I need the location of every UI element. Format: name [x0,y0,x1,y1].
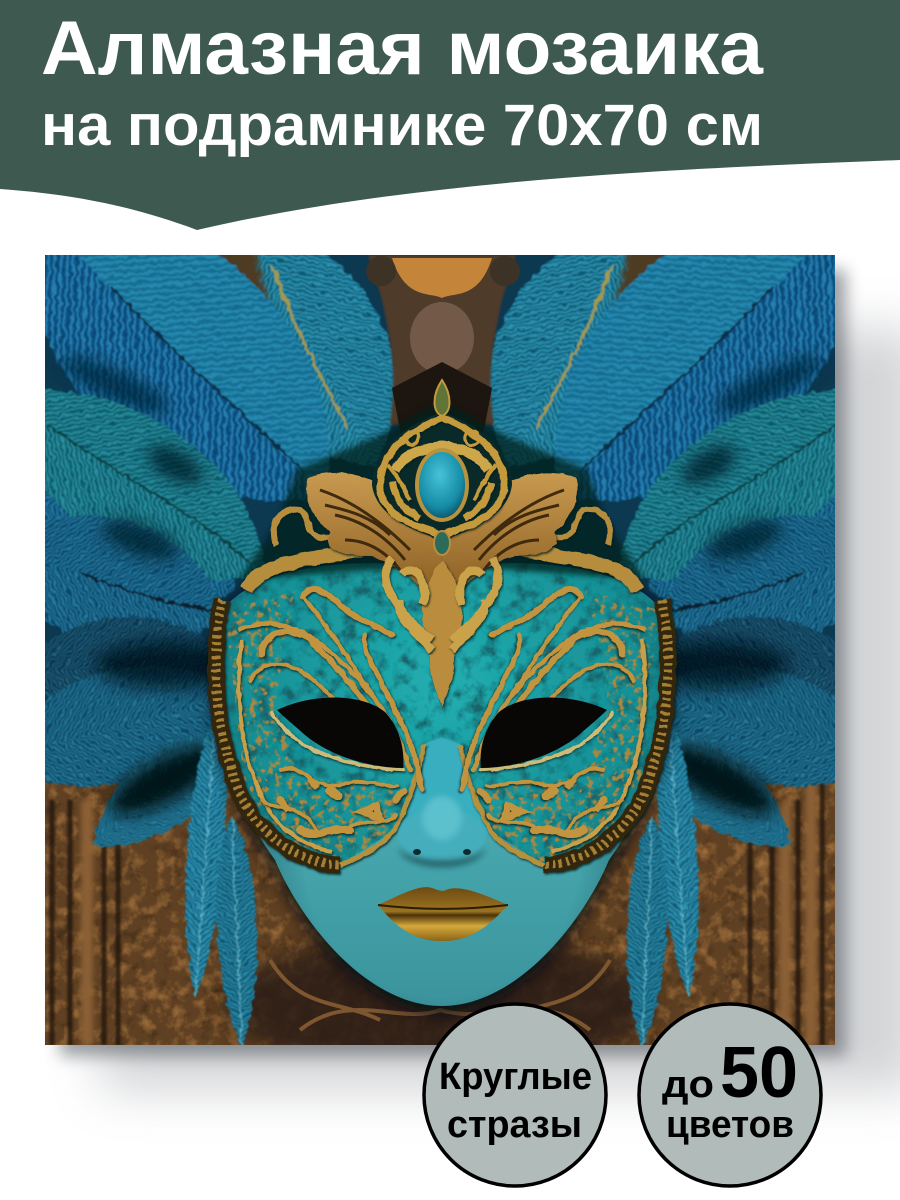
acanthus leaf left [306,472,442,588]
canvas shadow [60,270,900,1090]
left rim [216,600,424,865]
badge: round rhinestones [424,1004,606,1186]
feathers: left side [45,255,394,1045]
gold rim [216,600,668,865]
teardrop [434,380,450,416]
forehead scrolls [386,558,498,650]
gold flecks left cheek [240,770,398,866]
nose bridge [402,738,488,834]
filigree left [240,589,422,835]
badge: up to 50 colours [639,1004,821,1186]
upper mask with crackle [224,566,660,864]
dark crown backing [372,412,512,540]
badge: up to 50 colours: 50 [720,1033,798,1113]
top bronze ornament [366,255,520,440]
left eye [277,698,403,768]
mask [200,550,680,1020]
gold flecks right temple [584,590,659,790]
gold flecks right cheek [486,770,644,866]
badge: up to 50 colours: до [662,1064,714,1106]
right rim [460,600,668,865]
background: bronze frame [45,255,835,1075]
subtitle: на подрамнике 70х70 см [41,93,763,158]
canvas artwork [45,255,835,1045]
feathers: right side [489,255,835,1045]
dark crown surround [239,400,645,580]
mask shadow [212,566,672,1014]
oval gemstone [415,448,469,522]
badge: round rhinestones: Круглые [439,1056,592,1098]
nose [398,796,486,868]
central drop [422,560,462,705]
gold flecks left temple [225,590,300,790]
header banner [0,0,900,230]
crown scrolls [380,418,504,535]
badge: round rhinestones: стразы [447,1104,582,1146]
gold lips [378,887,508,941]
filigree right [462,589,644,835]
leaf veins [320,490,564,570]
right eye [481,698,607,768]
gold crown [239,380,645,705]
gem [419,452,465,518]
badge: up to 50 colours: цветов [666,1104,794,1146]
title: Алмазная мозаика [41,6,764,91]
crown band [246,509,638,590]
lower face [230,564,654,1006]
acanthus leaf right [442,473,577,605]
